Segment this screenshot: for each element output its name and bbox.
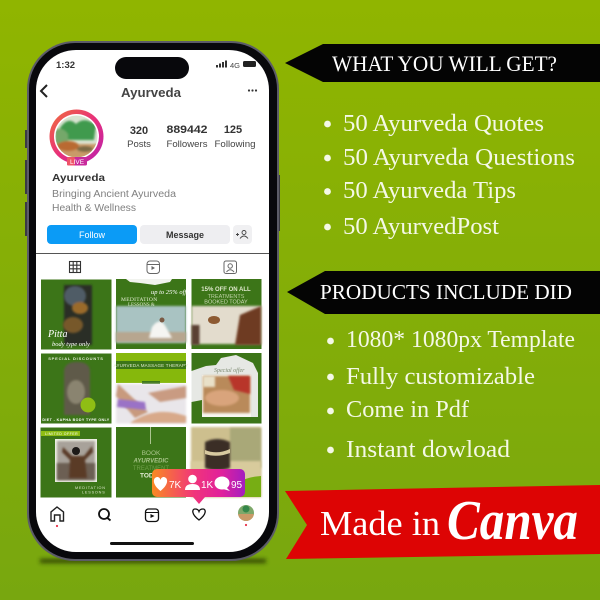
stats: [127, 124, 256, 150]
banner: products include: PRODUCTS INCLUDE DID: [320, 280, 572, 304]
post 1: [41, 280, 112, 350]
post 2: LESSONS &: [128, 303, 155, 308]
bottom nav: [51, 505, 254, 545]
post 4: DIET - KAPHA BODY TYPE ONLY: [42, 418, 110, 422]
banner: what you will get: [285, 44, 600, 82]
item: 50 Ayurveda Quotes: [343, 111, 544, 137]
user icon: [185, 475, 200, 490]
post 1: body type only: [52, 341, 90, 348]
item: 50 Ayurveda Tips: [343, 178, 516, 204]
reels icon: [146, 509, 158, 522]
item: Fully customizable: [346, 364, 535, 390]
post 2: MEDITATION: [121, 297, 157, 303]
profile avatar: [238, 505, 254, 526]
item: 50 AyurvedPost: [343, 214, 499, 240]
buttons: Message: [166, 230, 204, 240]
home icon: [51, 507, 64, 527]
post 3: 15% OFF ON ALL: [201, 287, 251, 293]
profile header: Ayurveda: [121, 86, 182, 100]
signal: [216, 60, 227, 68]
reach popup: [152, 469, 245, 504]
ribbon: made in canva: Canva: [447, 490, 578, 552]
post 7: [40, 428, 112, 498]
reach popup: 95: [231, 480, 243, 491]
phone body: [27, 41, 279, 561]
reach popup: 1K: [201, 480, 214, 491]
item: 50 Ayurveda Questions: [343, 145, 575, 171]
phone side buttons: [25, 130, 280, 236]
banner: products include: [287, 271, 600, 314]
list: products include: [327, 327, 575, 463]
bio: [52, 172, 176, 214]
post 7: LESSONS: [82, 490, 106, 494]
reach popup: 7K: [169, 480, 182, 491]
phone: [25, 41, 280, 561]
home indicator: [110, 542, 194, 545]
post 5: [114, 353, 188, 424]
dynamic island: [115, 57, 189, 79]
post 3: [192, 279, 262, 349]
status bar: 4G: [230, 61, 240, 70]
stats: Followers: [166, 139, 208, 150]
post 8: TREATMENT: [133, 466, 169, 472]
divider: [36, 253, 269, 254]
heart icon: [154, 477, 167, 491]
post 3: BOOKED TODAY: [204, 300, 248, 306]
ribbon: made in canva: Made in: [320, 504, 440, 543]
screen: [36, 50, 269, 552]
heart icon: [193, 509, 205, 520]
bio: Ayurveda: [52, 172, 105, 184]
post 9: [191, 427, 261, 497]
post 8: BOOK: [142, 450, 161, 457]
profile header: [41, 85, 257, 100]
avatar: [50, 110, 104, 166]
post 6: [192, 353, 262, 424]
bio: Health & Wellness: [52, 203, 136, 214]
post 4: SPECIAL DISCOUNTS: [48, 356, 104, 361]
post 4: [41, 354, 112, 424]
battery: [243, 61, 256, 67]
post 6: Special offer: [214, 367, 245, 374]
phone shadow: [40, 559, 266, 563]
post 8: [116, 427, 186, 498]
post 8: AYURVEDIC: [133, 458, 169, 464]
list: what you will get: [324, 111, 575, 240]
post 3: TREATMENTS: [208, 294, 245, 300]
stats: 889442: [166, 124, 208, 136]
stats: Posts: [127, 139, 151, 150]
item: Come in Pdf: [346, 397, 469, 423]
post 8: TODAY: [140, 472, 163, 480]
search icon: [99, 509, 110, 520]
stats: Following: [214, 139, 256, 150]
post 2: [116, 279, 187, 349]
stats: 125: [224, 124, 242, 136]
status bar: 1:32: [56, 60, 75, 71]
post 2: up to 25% off: [151, 289, 187, 296]
item: Instant dowload: [346, 437, 510, 463]
comment icon: [214, 476, 230, 491]
stats: 320: [130, 125, 148, 137]
live badge: LIVE: [70, 159, 85, 166]
bio: Bringing Ancient Ayurveda: [52, 189, 176, 200]
post grid: [40, 279, 262, 498]
buttons: [47, 225, 252, 244]
status bar: [56, 57, 256, 79]
post 7: LIMITED OFFER: [45, 432, 78, 436]
buttons: Follow: [79, 230, 105, 240]
post 5: AYURVEDA MASSAGE THERAPY: [114, 363, 188, 368]
banner: what you will get: WHAT YOU WILL GET?: [332, 51, 557, 76]
item: 1080* 1080px Template: [346, 327, 575, 353]
tab icons: [70, 261, 236, 274]
post 7: MEDITATION: [75, 486, 106, 490]
post 1: Pitta: [47, 329, 67, 340]
ribbon: made in canva: [285, 485, 600, 559]
